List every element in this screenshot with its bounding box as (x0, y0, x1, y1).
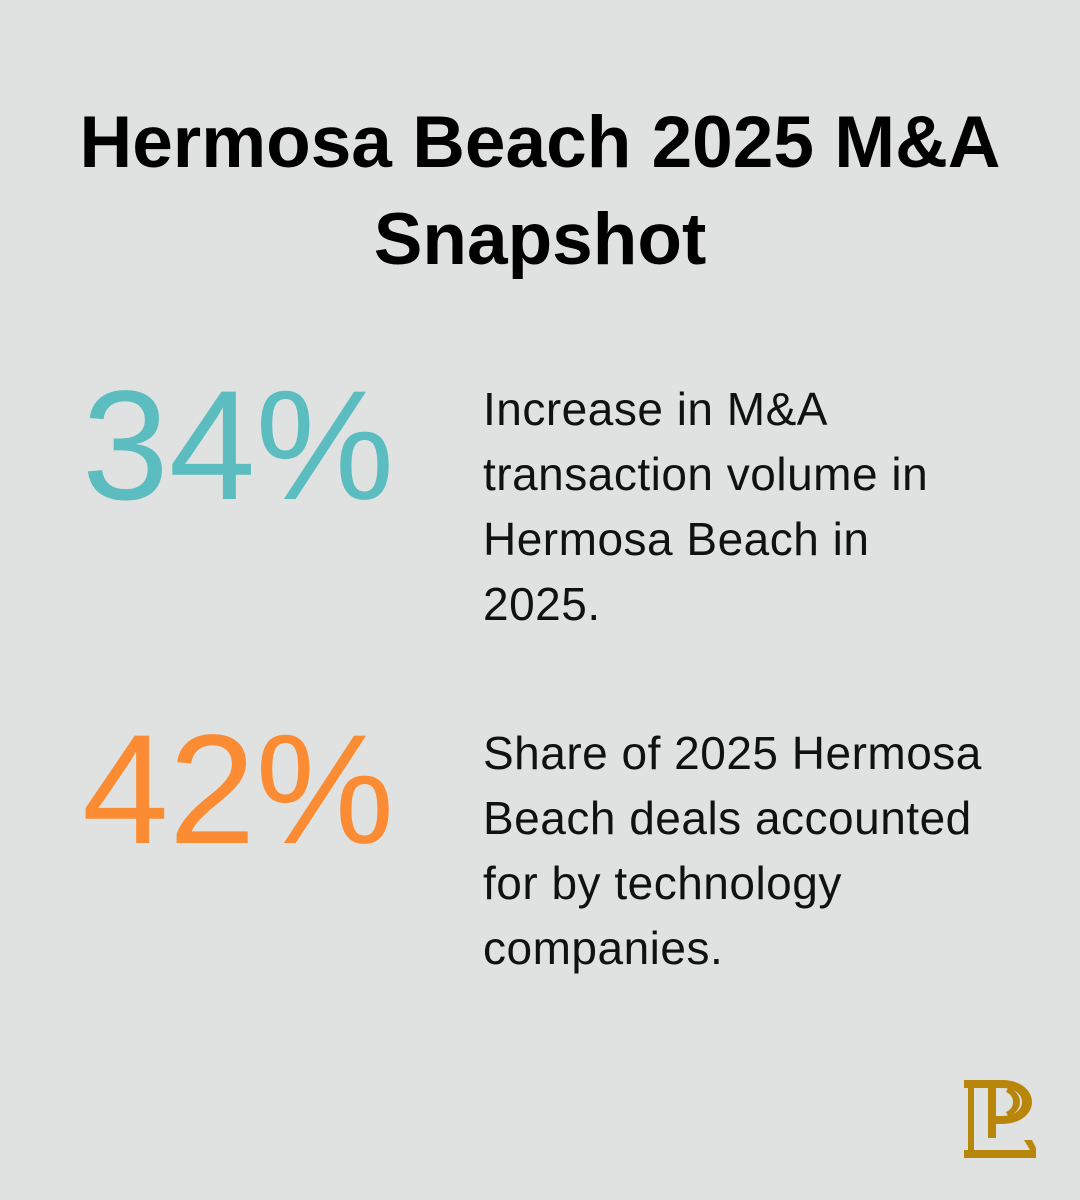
text: 42% description: Beach deals accounted (483, 792, 972, 844)
text: 34% description: 2025. (483, 578, 601, 630)
stat: 42%: 42% (82, 703, 394, 877)
stat: 34%: 34% (82, 359, 394, 533)
text: 42% description: Share of 2025 Hermosa (483, 727, 982, 779)
text: 34% description (483, 383, 928, 630)
icon: logo (964, 1080, 1036, 1158)
text: 34% description: Increase in M&A (483, 383, 828, 435)
title: Hermosa Beach 2025 M&A (79, 102, 1001, 183)
title: Snapshot (374, 199, 706, 280)
text: 42% description: companies. (483, 922, 723, 974)
text: 34% description: transaction volume in (483, 448, 928, 500)
text: 42% description (483, 727, 982, 974)
title (79, 102, 1001, 280)
text: 34% description: Hermosa Beach in (483, 513, 869, 565)
text: 42% description: for by technology (483, 857, 842, 909)
